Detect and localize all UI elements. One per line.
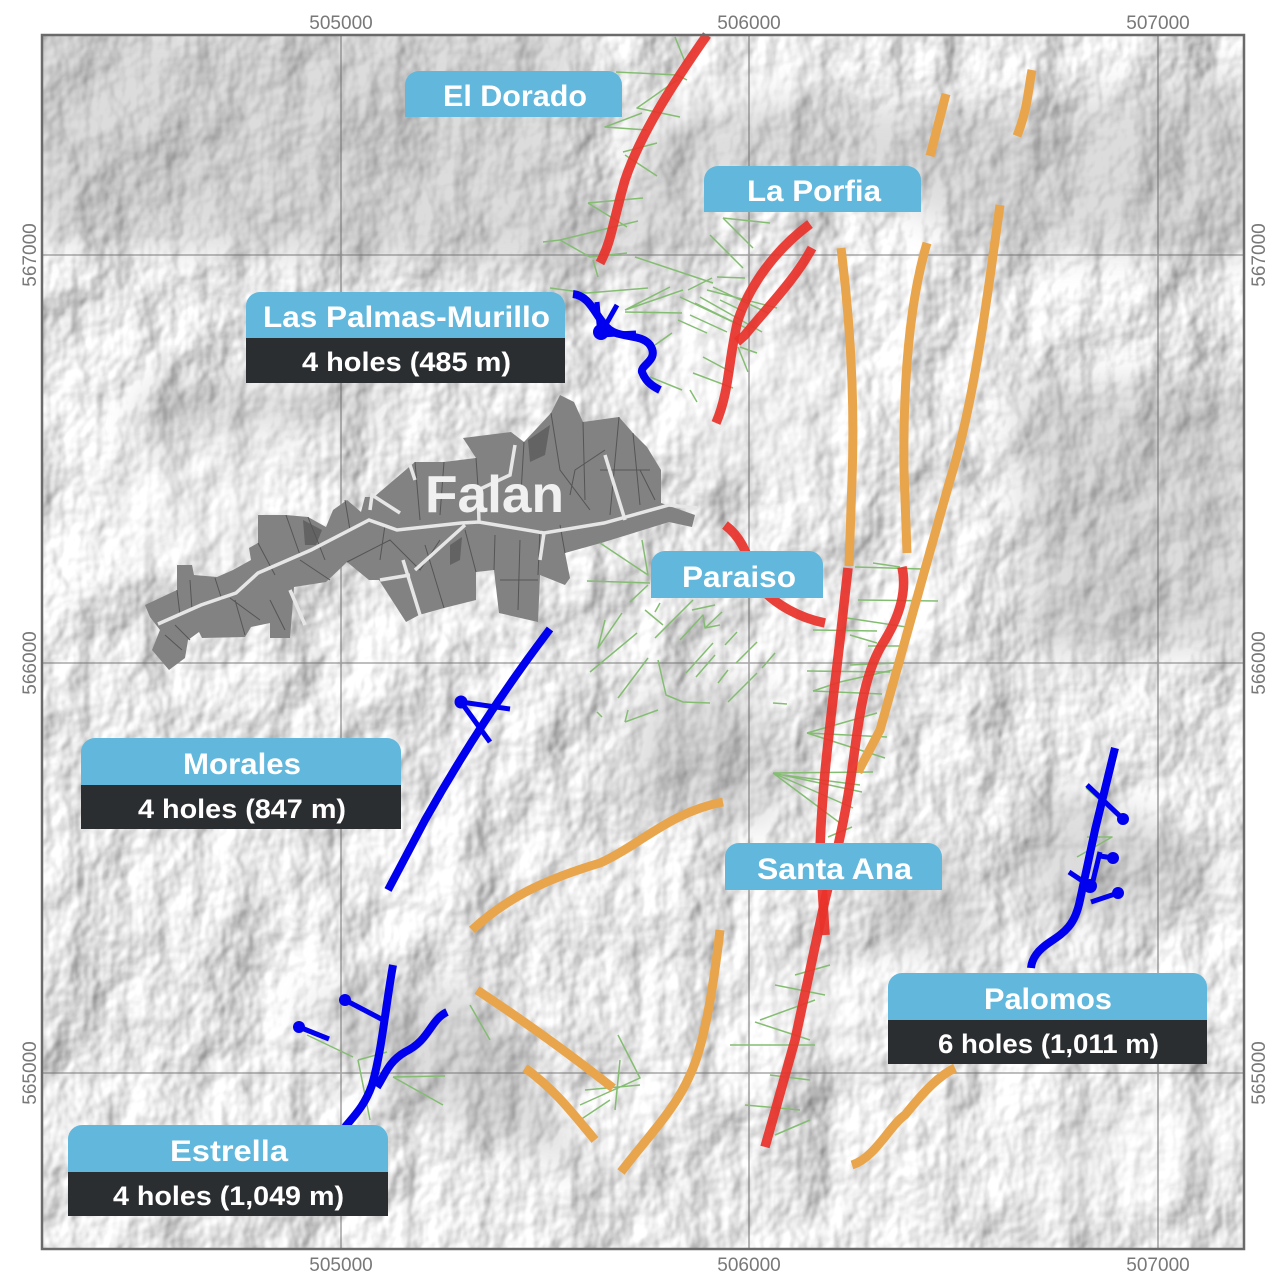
- label: Palomos: Palomos: [984, 983, 1112, 1016]
- label: La Porfia: [704, 166, 921, 212]
- label: Palomos: 6 holes (1,011 m): [938, 1029, 1159, 1059]
- blue trace: Estrella: [293, 965, 447, 1127]
- coordinate labels: left: 565000: [20, 1041, 41, 1105]
- label: El Dorado: El Dorado: [443, 80, 587, 113]
- coordinate labels: right: 567000: [1249, 223, 1270, 287]
- coordinate labels: bottom: [309, 1255, 1190, 1276]
- coordinate labels: left: 567000: [20, 223, 41, 287]
- label: Las Palmas-Murillo: 4 holes (485 m): [302, 347, 511, 377]
- label: Estrella: 4 holes (1,049 m): [113, 1181, 344, 1211]
- coordinate labels: top: 506000: [717, 13, 781, 34]
- label: La Porfia: La Porfia: [747, 175, 881, 208]
- label: Morales: [81, 738, 401, 829]
- label: Morales: Morales: [183, 748, 301, 781]
- drill targets: blue: [293, 294, 1129, 1127]
- coordinate labels: right: 566000: [1249, 631, 1270, 695]
- drill traces: green: [307, 37, 1112, 1135]
- coordinate labels: top: 507000: [1126, 13, 1190, 34]
- town: Falan: [145, 395, 697, 670]
- blue trace: Las Palmas-Murillo: [573, 294, 660, 390]
- coordinate labels: top: 505000: [309, 13, 373, 34]
- coordinate labels: right: [1249, 223, 1270, 1105]
- blue trace: Palomos: [1031, 748, 1129, 968]
- label: Paraiso: Paraiso: [682, 561, 796, 594]
- town name: Falan: [425, 466, 564, 524]
- coordinate labels: bottom: 506000: [717, 1255, 781, 1276]
- coordinate labels: right: 565000: [1249, 1041, 1270, 1105]
- label: Santa Ana: [725, 843, 942, 890]
- label: Estrella: Estrella: [170, 1135, 288, 1168]
- coordinate labels: bottom: 507000: [1126, 1255, 1190, 1276]
- fault lines: red: [600, 35, 904, 1147]
- blue trace: Morales: [388, 629, 550, 890]
- coordinate labels: left: [20, 223, 41, 1105]
- label: Santa Ana: Santa Ana: [757, 853, 912, 886]
- label: Paraiso: [651, 551, 823, 598]
- fault lines: orange: [472, 70, 1032, 1172]
- label: Palomos: [888, 973, 1207, 1064]
- label: Las Palmas-Murillo: [246, 292, 565, 383]
- label: Las Palmas-Murillo: Las Palmas-Murillo: [263, 301, 550, 334]
- coordinate labels: left: 566000: [20, 631, 41, 695]
- label: El Dorado: [405, 71, 622, 117]
- label: Morales: 4 holes (847 m): [138, 794, 346, 824]
- label: Estrella: [68, 1125, 388, 1216]
- coordinate labels: bottom: 505000: [309, 1255, 373, 1276]
- coordinate labels: top: [309, 13, 1190, 34]
